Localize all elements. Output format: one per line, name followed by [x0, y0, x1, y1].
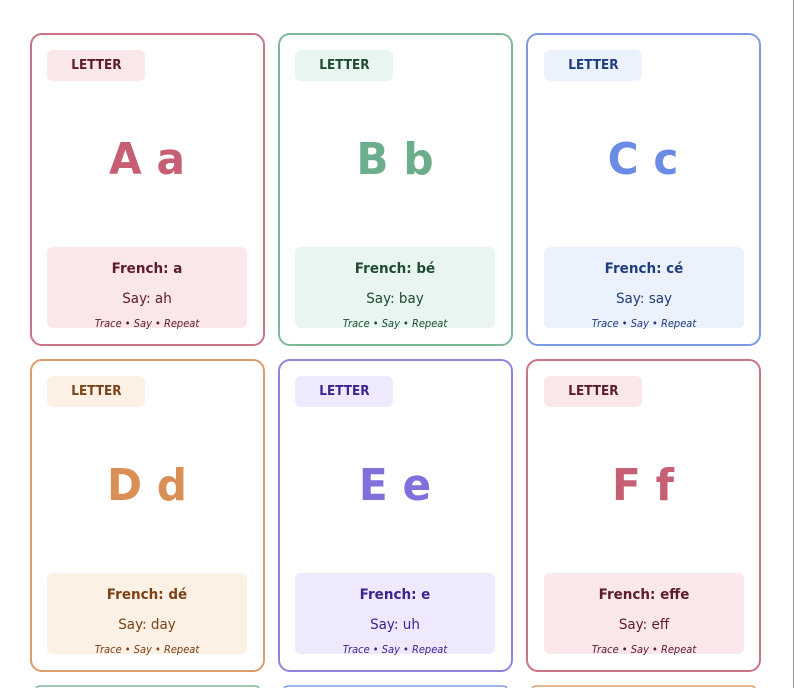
card: clipped orange card, third row: [531, 685, 756, 688]
card: clipped blue card, third row: [283, 685, 508, 688]
large letter pair: A a: [109, 134, 185, 185]
info panel: [47, 247, 247, 328]
French name: French: bé: [355, 261, 435, 277]
French name: French: dé: [107, 587, 187, 603]
badge: letter: [544, 50, 642, 81]
info panel: [47, 573, 247, 654]
info panel: [544, 247, 744, 328]
practice prompt: Trace • Say • Repeat: [95, 644, 199, 656]
card: letter C: [526, 33, 761, 346]
info panel: [544, 573, 744, 654]
info panel: [295, 247, 495, 328]
badge: letter: LETTER: [319, 384, 370, 399]
French name: French: cé: [605, 261, 683, 277]
French name: French: effe: [599, 587, 689, 603]
pronunciation: Say: ah: [122, 291, 172, 307]
page edge line: [793, 0, 794, 688]
card: clipped green card, third row: [35, 685, 260, 688]
card: letter E: [278, 359, 513, 672]
badge: letter: LETTER: [568, 58, 619, 73]
badge: letter: [544, 376, 642, 407]
pronunciation: Say: eff: [619, 617, 669, 633]
French name: French: e: [360, 587, 430, 603]
badge: letter: [47, 376, 145, 407]
pronunciation: Say: bay: [366, 291, 424, 307]
large letter pair: C c: [608, 134, 678, 185]
badge: letter: LETTER: [319, 58, 370, 73]
pronunciation: Say: uh: [370, 617, 420, 633]
badge: letter: [47, 50, 145, 81]
practice prompt: Trace • Say • Repeat: [592, 318, 696, 330]
practice prompt: Trace • Say • Repeat: [592, 644, 696, 656]
badge: letter: [295, 376, 393, 407]
card: letter A: [30, 33, 265, 346]
card: letter D: [30, 359, 265, 672]
practice prompt: Trace • Say • Repeat: [343, 318, 447, 330]
large letter pair: D d: [107, 460, 187, 511]
large letter pair: E e: [359, 460, 431, 511]
info panel: [295, 573, 495, 654]
large letter pair: F f: [612, 460, 674, 511]
badge: letter: [295, 50, 393, 81]
large letter pair: B b: [356, 134, 434, 185]
badge: letter: LETTER: [71, 58, 122, 73]
practice prompt: Trace • Say • Repeat: [95, 318, 199, 330]
pronunciation: Say: day: [118, 617, 176, 633]
badge: letter: LETTER: [71, 384, 122, 399]
practice prompt: Trace • Say • Repeat: [343, 644, 447, 656]
card: letter F: [526, 359, 761, 672]
card: letter B: [278, 33, 513, 346]
pronunciation: Say: say: [616, 291, 672, 307]
badge: letter: LETTER: [568, 384, 619, 399]
French name: French: a: [112, 261, 182, 277]
